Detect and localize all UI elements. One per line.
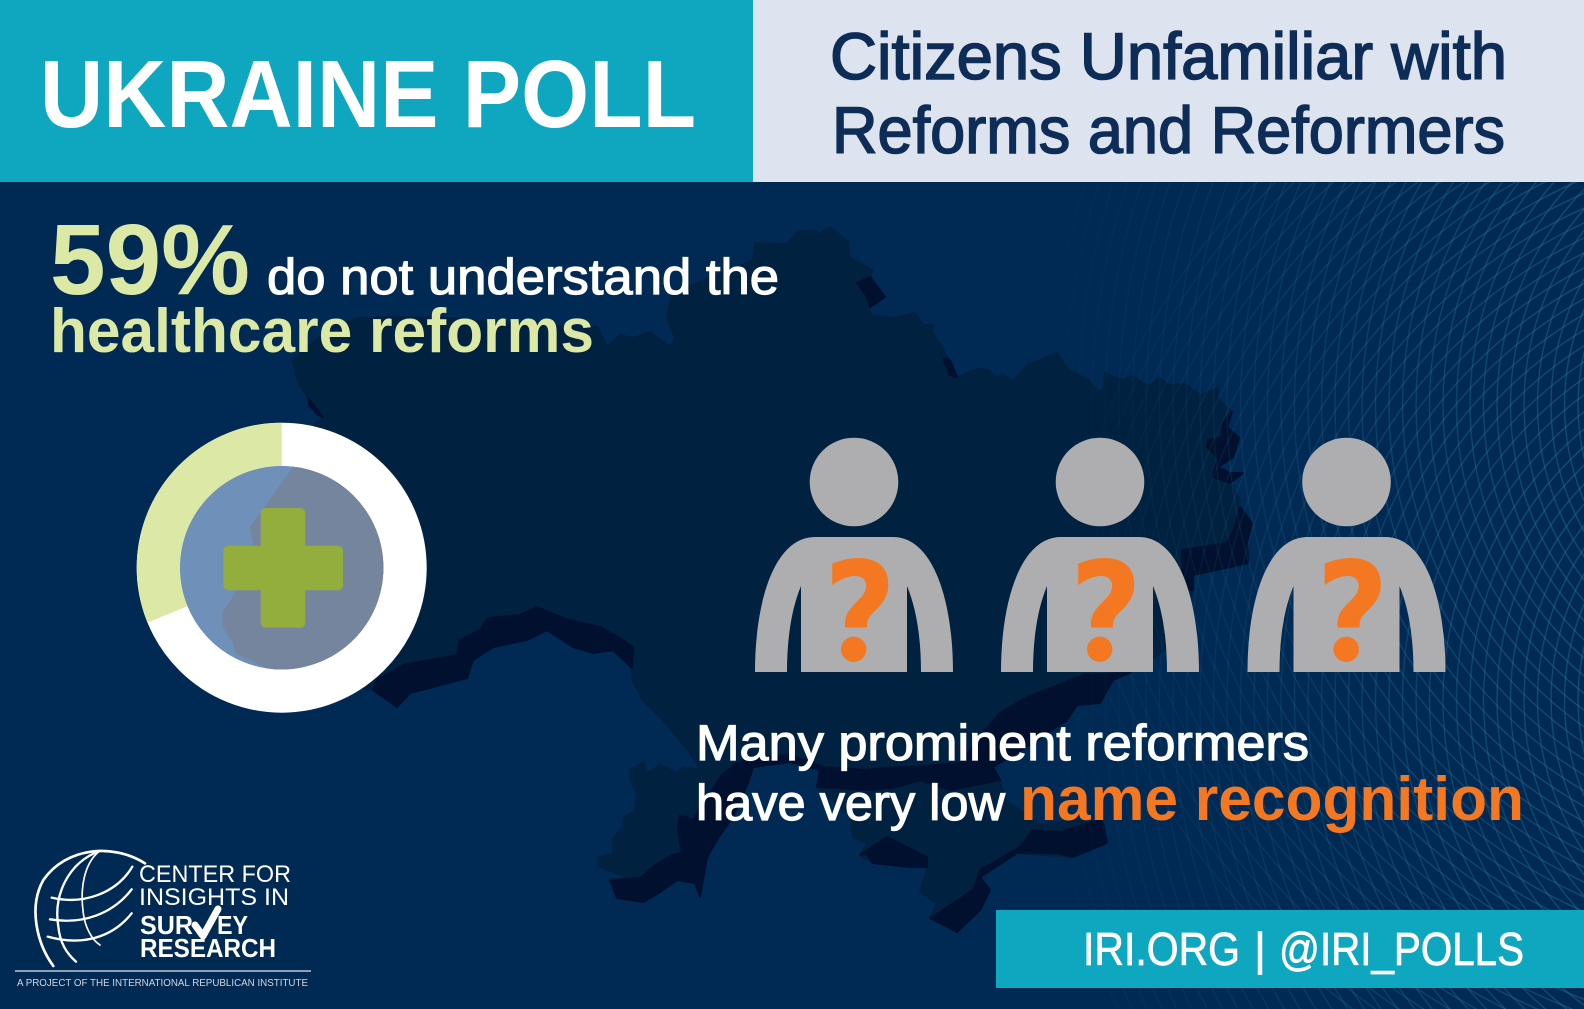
- icon: person 1 with question mark: [755, 438, 953, 696]
- icon: medical cross: [223, 508, 343, 628]
- icon: person 1 with question mark: ?: [824, 532, 896, 696]
- text: Many prominent reformers: Many prominent reformers: [696, 715, 1309, 771]
- text: name recognition: name recognition: [1020, 765, 1524, 834]
- icon: globe: [36, 851, 145, 966]
- logo text: EY: [217, 910, 248, 940]
- text: do not understand the: do not understand the: [267, 249, 779, 305]
- logo text: SUR: [140, 910, 193, 940]
- statistic: 59%: 59%: [50, 204, 250, 316]
- logo text: CENTER FOR: [139, 861, 291, 888]
- text: healthcare reforms: healthcare reforms: [50, 297, 594, 366]
- donut centre: [180, 466, 384, 670]
- header band: subtitle: [753, 0, 1584, 182]
- text: have very low: have very low: [696, 775, 1006, 831]
- footer box: website and handle: [996, 910, 1584, 988]
- logo text: [139, 861, 291, 963]
- divider rule: [15, 970, 311, 972]
- icon: person 2 with question mark: ?: [1070, 532, 1142, 696]
- icon: person 3 with question mark: ?: [1316, 532, 1389, 696]
- icon: person 3 with question mark: [1248, 438, 1446, 696]
- logo text: INSIGHTS IN: [139, 884, 289, 911]
- logo text: RESEARCH: [140, 933, 276, 963]
- subtitle text: Reforms and Reformers: [832, 93, 1505, 167]
- map of Ukraine: [222, 227, 1252, 932]
- logo: Center for Insights in Survey Research: [15, 851, 311, 989]
- donut segment: green share: [137, 423, 282, 623]
- donut chart with medical cross: [136, 422, 427, 713]
- icon: person 2 with question mark: [1001, 438, 1199, 696]
- header band: Ukraine Poll: [0, 0, 753, 182]
- tagline: A PROJECT OF THE INTERNATIONAL REPUBLICAN INSTITUTE: [17, 977, 308, 989]
- heading: Ukraine Poll: UKRAINE POLL: [40, 41, 696, 148]
- icon: check mark: [195, 909, 218, 936]
- callout: name recognition: [696, 715, 1524, 834]
- callout: 59% healthcare reforms: [50, 204, 779, 366]
- footer box: website and handle: @IRI_POLLS: [1279, 923, 1524, 975]
- footer box: website and handle: IRI.ORG: [1083, 923, 1240, 975]
- footer box: website and handle: |: [1254, 923, 1266, 975]
- subtitle text: Citizens Unfamiliar with: [830, 19, 1507, 93]
